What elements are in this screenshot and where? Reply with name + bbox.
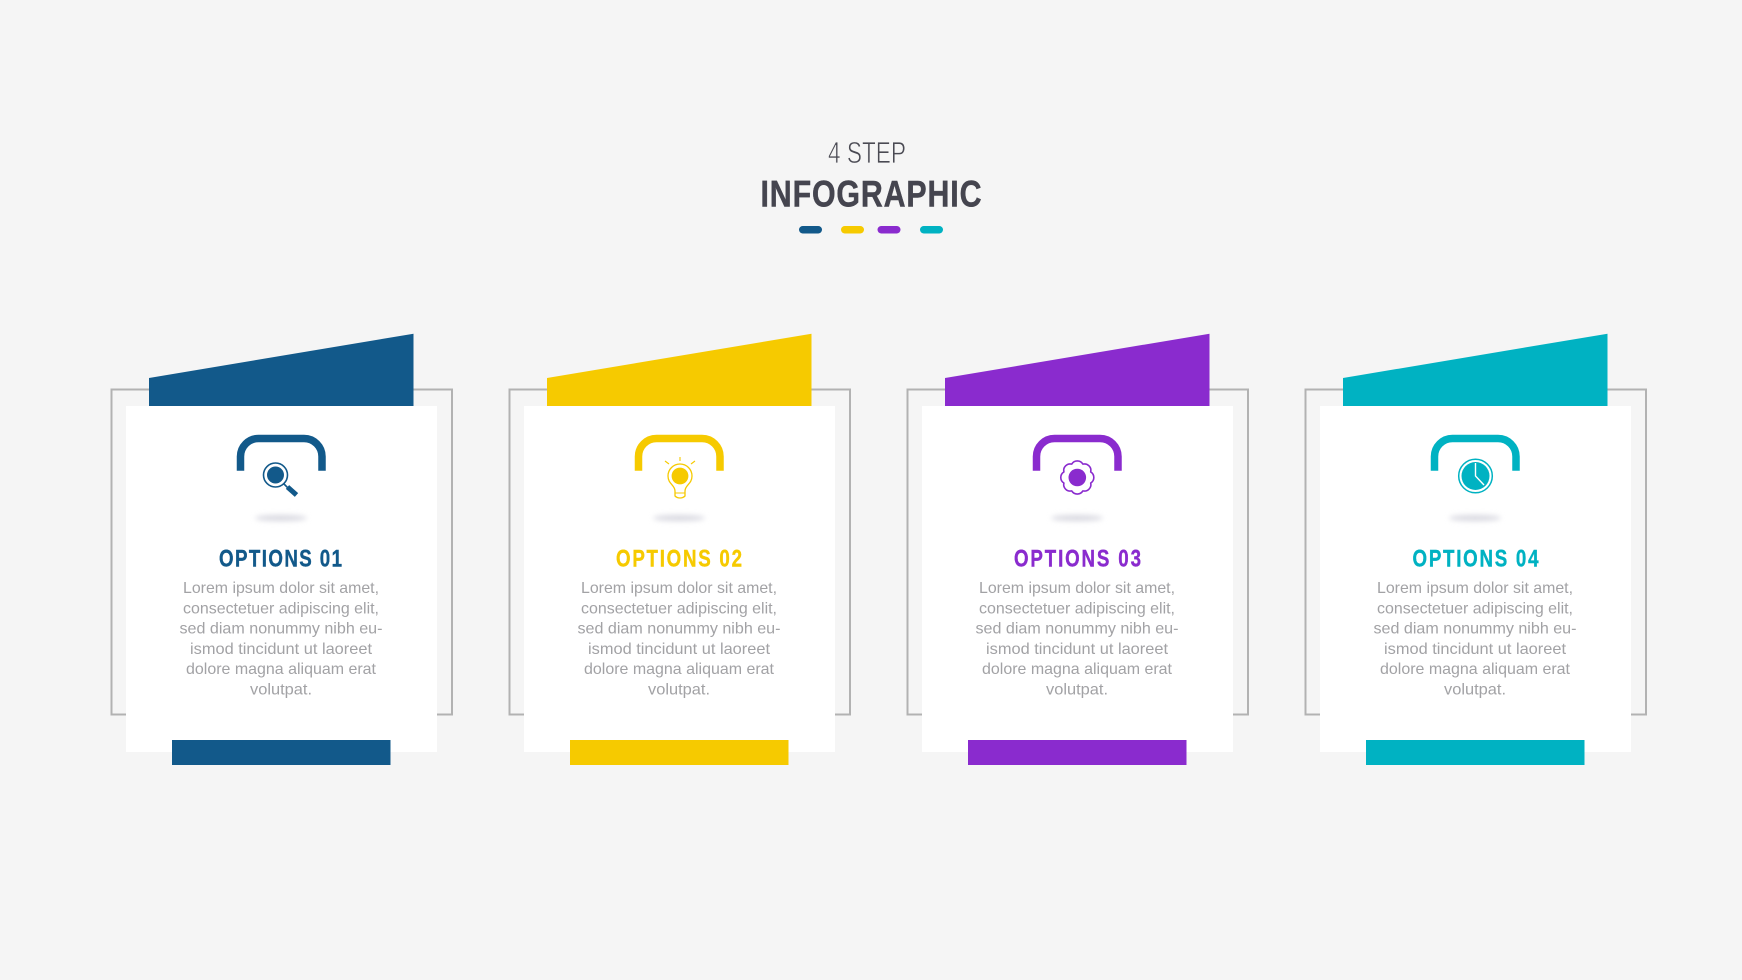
icon: clock [1459, 459, 1492, 493]
body text: volutpat. [1046, 682, 1108, 698]
body text: consectetuer adipiscing elit, [1377, 600, 1573, 617]
colour dashes [799, 226, 943, 234]
body text: ismod tincidunt ut laoreet [986, 641, 1169, 658]
body text: sed diam nonummy nibh eu- [578, 621, 780, 638]
subtitle: 4 STEP: 4 STEP [828, 135, 906, 170]
body text: volutpat. [1444, 682, 1506, 698]
body text: dolore magna aliquam erat [982, 661, 1173, 678]
body text: Lorem ipsum dolor sit amet, [581, 580, 777, 597]
body text: dolore magna aliquam erat [1380, 661, 1571, 678]
body text: ismod tincidunt ut laoreet [190, 641, 373, 658]
icon: bracket [638, 438, 720, 471]
heading: INFOGRAPHIC: INFOGRAPHIC [761, 174, 981, 215]
icon shadow [1051, 515, 1103, 521]
body text: dolore magna aliquam erat [584, 661, 775, 678]
icon: bracket [1434, 438, 1516, 471]
icon: bracket [1036, 438, 1118, 471]
option heading: OPTIONS 03 [1014, 545, 1141, 572]
body text: Lorem ipsum dolor sit amet, [979, 580, 1175, 597]
body text: dolore magna aliquam erat [186, 661, 377, 678]
body text [578, 580, 780, 698]
icon: magnifier [264, 463, 296, 495]
body text: sed diam nonummy nibh eu- [180, 621, 382, 638]
panel: options 02 [510, 334, 850, 765]
icon: bracket [240, 438, 322, 471]
body text [976, 580, 1178, 698]
body text [1374, 580, 1576, 698]
panel: options 01 [112, 334, 452, 765]
panel: options 03 [908, 334, 1248, 765]
option heading: OPTIONS 04 [1413, 545, 1539, 572]
icon shadow [1449, 515, 1501, 521]
body text: volutpat. [648, 682, 710, 698]
body text: consectetuer adipiscing elit, [979, 600, 1175, 617]
body text: ismod tincidunt ut laoreet [1384, 641, 1567, 658]
body text: Lorem ipsum dolor sit amet, [1377, 580, 1573, 597]
option heading: OPTIONS 02 [616, 545, 742, 572]
body text: sed diam nonummy nibh eu- [1374, 621, 1576, 638]
body text [180, 580, 382, 698]
body text: consectetuer adipiscing elit, [183, 600, 379, 617]
icon: light bulb [665, 457, 695, 498]
icon shadow [255, 515, 307, 521]
icon shadow [653, 515, 705, 521]
body text: Lorem ipsum dolor sit amet, [183, 580, 379, 597]
title [761, 135, 981, 234]
icon: gear [1061, 461, 1094, 494]
body text: sed diam nonummy nibh eu- [976, 621, 1178, 638]
body text: volutpat. [250, 682, 312, 698]
body text: consectetuer adipiscing elit, [581, 600, 777, 617]
body text: ismod tincidunt ut laoreet [588, 641, 771, 658]
panel: options 04 [1306, 334, 1646, 765]
option heading: OPTIONS 01 [219, 545, 342, 572]
